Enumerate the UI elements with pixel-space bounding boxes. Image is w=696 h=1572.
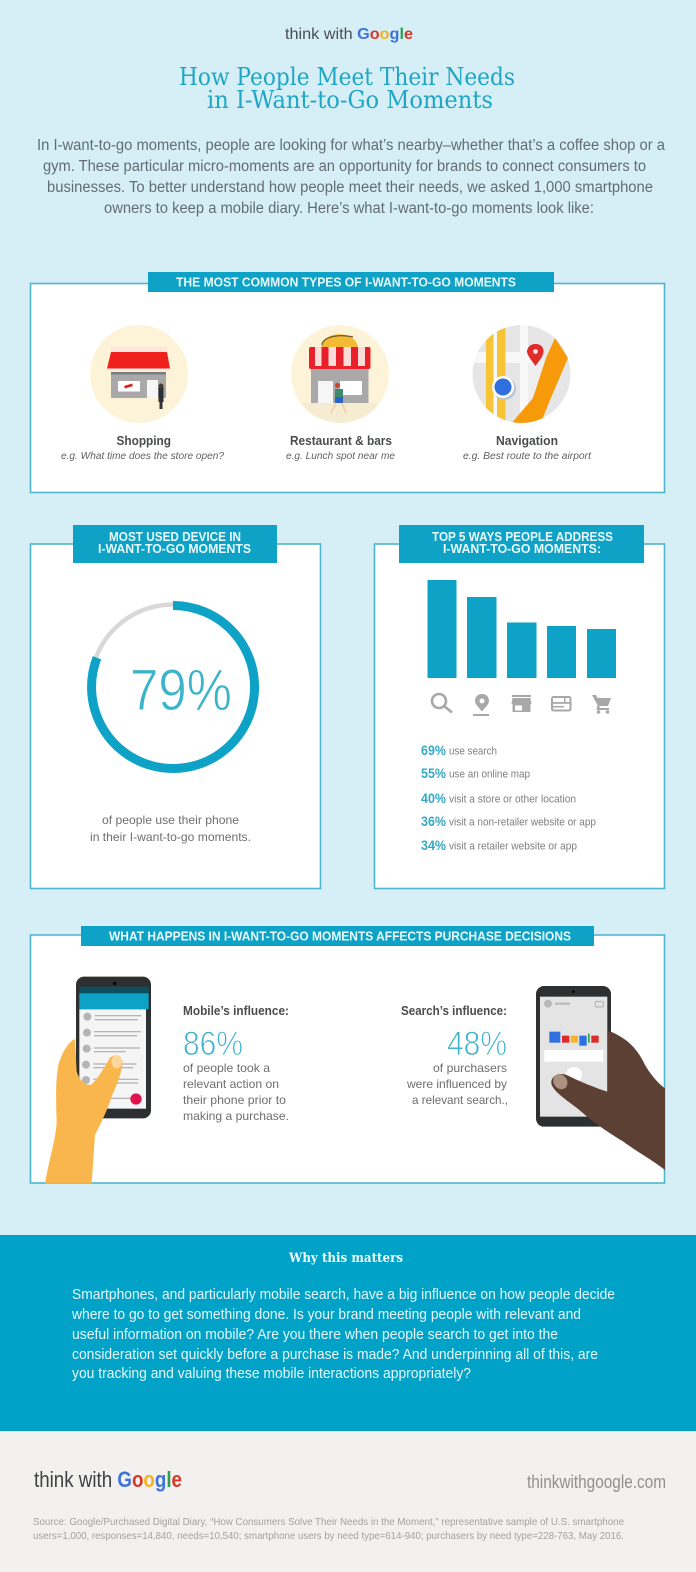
icon: shopping store [90, 325, 188, 423]
label: restaurant and bars: Restaurant & bars [290, 434, 392, 448]
stat: 86 percent: 86% [183, 1025, 243, 1063]
text: mobile influence [183, 1004, 289, 1123]
text: search influence: Search’s influence: [401, 1004, 507, 1018]
heading: top 5 ways: TOP 5 WAYS PEOPLE ADDRESS [432, 530, 613, 544]
list: ways: use an online map [449, 768, 530, 780]
heading: why this matters: Why this matters [288, 1251, 403, 1266]
text: mobile influence: making a purchase. [183, 1109, 289, 1123]
heading: purchase decisions: WHAT HAPPENS IN I-WANT-TO-GO MOMENTS AFFECTS PURCHASE DECISIONS [109, 930, 571, 944]
stat: 79 percent: 79% [130, 658, 232, 723]
text: why this matters body: where to go to get something done. Is your brand meeting people with relevant and [71, 1307, 581, 1323]
intro text [37, 137, 665, 217]
footer url: thinkwithgoogle.com [527, 1471, 666, 1492]
panel: footer [0, 1431, 696, 1572]
icon: store [512, 695, 532, 712]
list: ways [421, 743, 596, 853]
heading: most used device: MOST USED DEVICE IN [109, 530, 241, 544]
icon: web page [552, 697, 570, 710]
text: why this matters body: Smartphones, and particularly mobile search, have a big influence on how people decide [72, 1287, 615, 1303]
label: restaurant and bars: e.g. Lunch spot near me [286, 450, 395, 462]
caption: phone use: of people use their phone [102, 813, 239, 827]
icon: shopping cart [592, 695, 611, 714]
caption: phone use: in their I-want-to-go moments. [90, 830, 251, 844]
label: navigation: Navigation [496, 434, 558, 448]
illustration: hand holding phone, mobile [45, 977, 151, 1183]
list: ways: visit a non-retailer website or app [449, 816, 596, 828]
panel: why this matters [0, 1235, 696, 1431]
donut chart: 79 percent [92, 604, 255, 768]
heading: most common types [148, 272, 554, 292]
source note [33, 1516, 624, 1542]
panel: most common types [30, 272, 664, 492]
bar chart [428, 580, 616, 678]
text: mobile influence: their phone prior to [183, 1093, 286, 1107]
source note: users=1,000, responses=14,840, needs=10,540; smartphone users by need type=614-940; purchasers by need type=228-763, May 2016. [33, 1530, 624, 1542]
label: restaurant and bars [286, 434, 395, 462]
text: why this matters body: useful information on mobile? Are you there when people search to get into the [72, 1327, 558, 1343]
label: navigation: e.g. Best route to the airport [463, 450, 592, 462]
panel: most used device [30, 525, 320, 888]
text: search influence: were influenced by [406, 1077, 507, 1091]
icon: map pin [473, 694, 489, 716]
text: mobile influence: relevant action on [183, 1077, 279, 1091]
top logo: think with Google [285, 26, 413, 43]
panel: purchase decisions [30, 926, 665, 1183]
text: mobile influence: of people took a [183, 1061, 270, 1075]
icon: restaurant [290, 325, 390, 425]
list: ways: visit a retailer website or app [449, 840, 577, 852]
heading: most used device: I-WANT-TO-GO MOMENTS [98, 542, 251, 556]
text: search influence [401, 1004, 508, 1107]
heading: purchase decisions [81, 926, 594, 946]
list: ways: use search [449, 746, 497, 758]
text: why this matters body [71, 1287, 615, 1382]
label: shopping: Shopping [116, 434, 171, 448]
source note: Source: Google/Purchased Digital Diary, “How Consumers Solve Their Needs in the Moment,” representative sample of U.S. smartphone [33, 1516, 624, 1528]
text: why this matters body: consideration set quickly before a purchase is made? And underpinning all of this, are [72, 1347, 598, 1363]
text: mobile influence: Mobile’s influence: [183, 1004, 289, 1018]
panel: top 5 ways [374, 525, 664, 888]
list: ways: 40% [421, 791, 446, 806]
label: shopping [61, 434, 224, 462]
illustration: hand holding phone, search [536, 986, 665, 1170]
label: shopping: e.g. What time does the store open? [61, 450, 224, 462]
list: ways: 69% [421, 743, 446, 758]
intro text: businesses. To better understand how people meet their needs, we asked 1,000 smartphone [47, 179, 653, 196]
title: How People Meet Their Needs [179, 62, 515, 91]
heading: top 5 ways: I-WANT-TO-GO MOMENTS: [443, 542, 601, 556]
intro text: gym. These particular micro-moments are an opportunity for brands to connect consumers to [43, 158, 646, 175]
list: ways: 34% [421, 838, 446, 853]
heading: most used device [73, 525, 277, 563]
intro text: owners to keep a mobile diary. Here’s what I-want-to-go moments look like: [104, 200, 594, 217]
icon: search [432, 694, 452, 712]
list: ways: 36% [421, 814, 446, 829]
footer logo: think with Google [34, 1467, 182, 1492]
stat: 48 percent: 48% [447, 1025, 507, 1063]
label: navigation [463, 434, 592, 462]
text: why this matters body: you tracking and valuing these mobile interactions appropriately? [72, 1366, 471, 1382]
text: search influence: a relevant search., [412, 1093, 508, 1107]
list: ways: 55% [421, 766, 446, 781]
heading: most common types: THE MOST COMMON TYPES OF I-WANT-TO-GO MOMENTS [176, 276, 516, 290]
intro text: In I-want-to-go moments, people are looking for what’s nearby–whether that’s a coffee shop or a [37, 137, 665, 154]
icon: navigation map [472, 325, 572, 425]
heading: top 5 ways [399, 525, 644, 563]
caption: phone use [90, 813, 251, 844]
list: ways: visit a store or other location [449, 794, 576, 806]
title [179, 62, 515, 114]
text: search influence: of purchasers [433, 1061, 507, 1075]
title: in I-Want-to-Go Moments [207, 85, 493, 114]
